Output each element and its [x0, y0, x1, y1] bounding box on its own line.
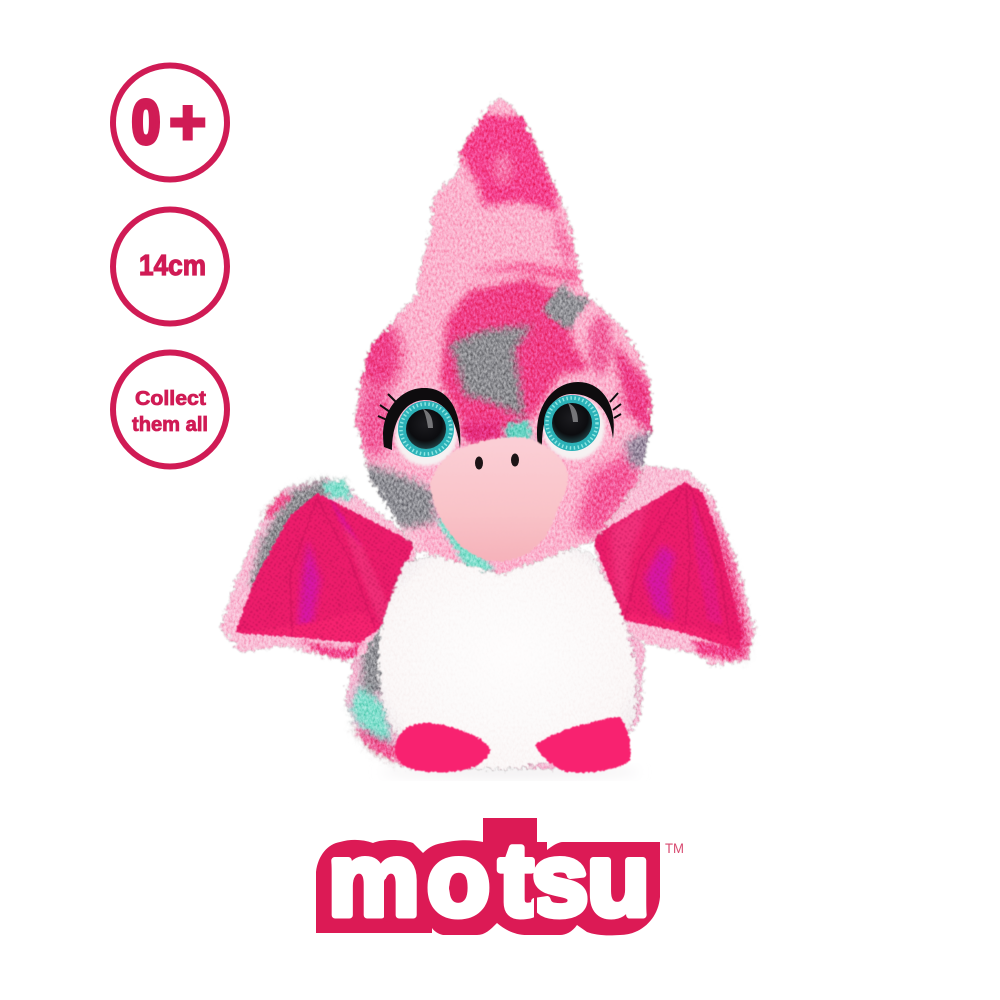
- head and crest fur: [354, 90, 655, 575]
- badge: size 14cm: 14cm: [139, 250, 206, 282]
- left wing: [220, 478, 420, 662]
- badge: age 0+: +: [169, 86, 206, 158]
- left foot: [395, 723, 490, 772]
- right foot: [535, 717, 630, 772]
- back body fur: [345, 560, 645, 768]
- badge: collect them all: them all: [132, 414, 208, 436]
- badge: collect them all: Collect: [135, 388, 206, 410]
- white belly: [378, 540, 637, 769]
- crest pink patches: [458, 110, 557, 212]
- logo wordmark: motsu: [328, 822, 650, 937]
- beak: [430, 437, 568, 561]
- nostrils: [475, 454, 519, 470]
- logo counters: [355, 850, 622, 922]
- badge: age 0+: 0: [132, 89, 160, 156]
- left eye: [378, 388, 460, 466]
- right wing: [590, 465, 755, 666]
- left wing fur fringe: [220, 478, 420, 662]
- head pink patches: [440, 278, 590, 440]
- right eye: [537, 382, 621, 460]
- badge: age 0+: [113, 66, 227, 180]
- logo backdrop: [316, 818, 660, 935]
- motsu logo: [316, 818, 684, 937]
- plush toy: pink pterodactyl: [220, 90, 755, 777]
- right wing membrane: [592, 482, 742, 650]
- floor shadow: [380, 767, 640, 777]
- badge: collect them all: [113, 352, 227, 466]
- right wing fur fringe: [590, 465, 755, 666]
- head teal patches: [505, 420, 532, 442]
- badge: size 14cm: [113, 210, 227, 324]
- left wing membrane: [235, 493, 415, 645]
- trademark: TM: [665, 840, 684, 856]
- head grey patches: [450, 325, 532, 418]
